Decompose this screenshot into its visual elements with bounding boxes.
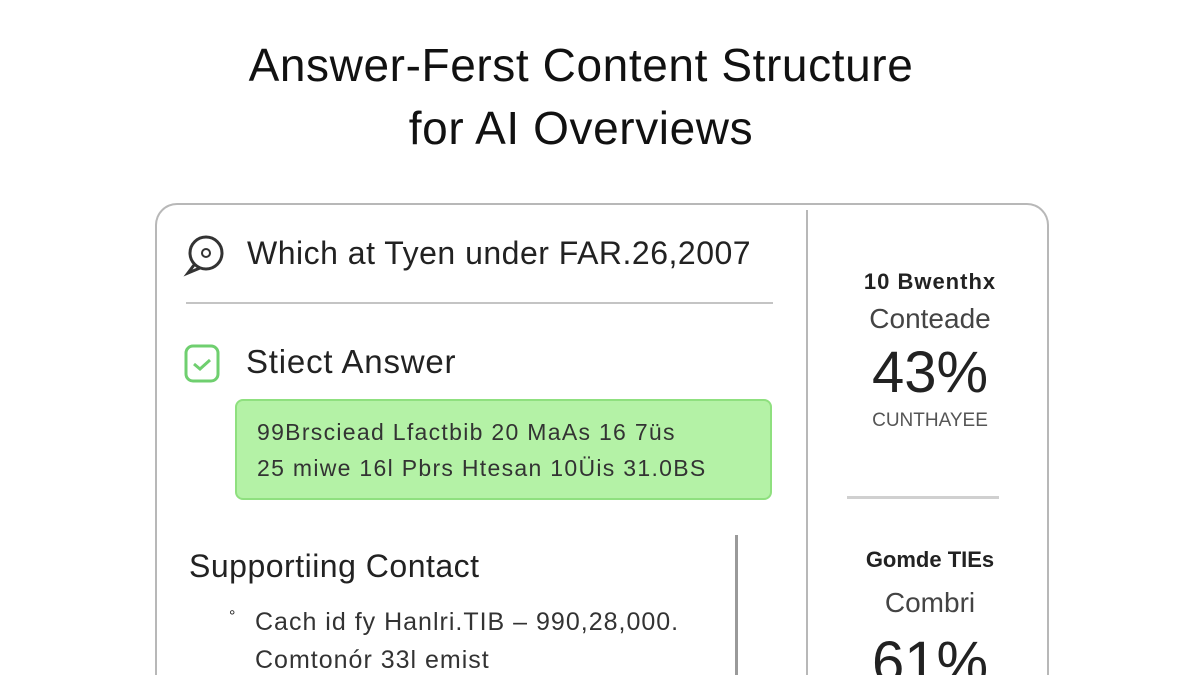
icon: check box (184, 344, 220, 382)
stat: 61% (866, 547, 994, 675)
supporting content: Comtonór 33l emist (255, 646, 490, 674)
title (248, 39, 913, 154)
supporting content (189, 548, 679, 674)
stat: 43%: 10 Bwenthx (864, 269, 996, 294)
stat: 61%: Gomde TIEs (866, 547, 994, 572)
answer box: 25 miwe 16l Pbrs Htesan 10Üis 31.0BS (257, 455, 707, 481)
icon: speech bubble (184, 236, 224, 276)
answer box (235, 399, 772, 500)
answer box: 99Brsciead Lfactbib 20 MaAs 16 7üs (257, 419, 676, 445)
stat: 43%: 43% (872, 340, 988, 405)
question header: Which at Tyen under FAR.26,2007 (247, 235, 751, 271)
title: for AI Overviews (409, 102, 753, 154)
card (155, 203, 1049, 675)
supporting content: Cach id fy Hanlri.TIB – 990,28,000. (255, 608, 679, 636)
direct answer heading: Stiect Answer (246, 343, 456, 380)
stat: 43%: Conteade (869, 303, 991, 334)
stat: 43% (864, 269, 996, 431)
title: Answer-Ferst Content Structure (249, 39, 913, 91)
stat: 61%: Combri (885, 587, 975, 618)
supporting content: ° (229, 608, 235, 625)
stat: 43%: CUNTHAYEE (872, 410, 988, 431)
supporting content: Supportiing Contact (189, 548, 480, 584)
